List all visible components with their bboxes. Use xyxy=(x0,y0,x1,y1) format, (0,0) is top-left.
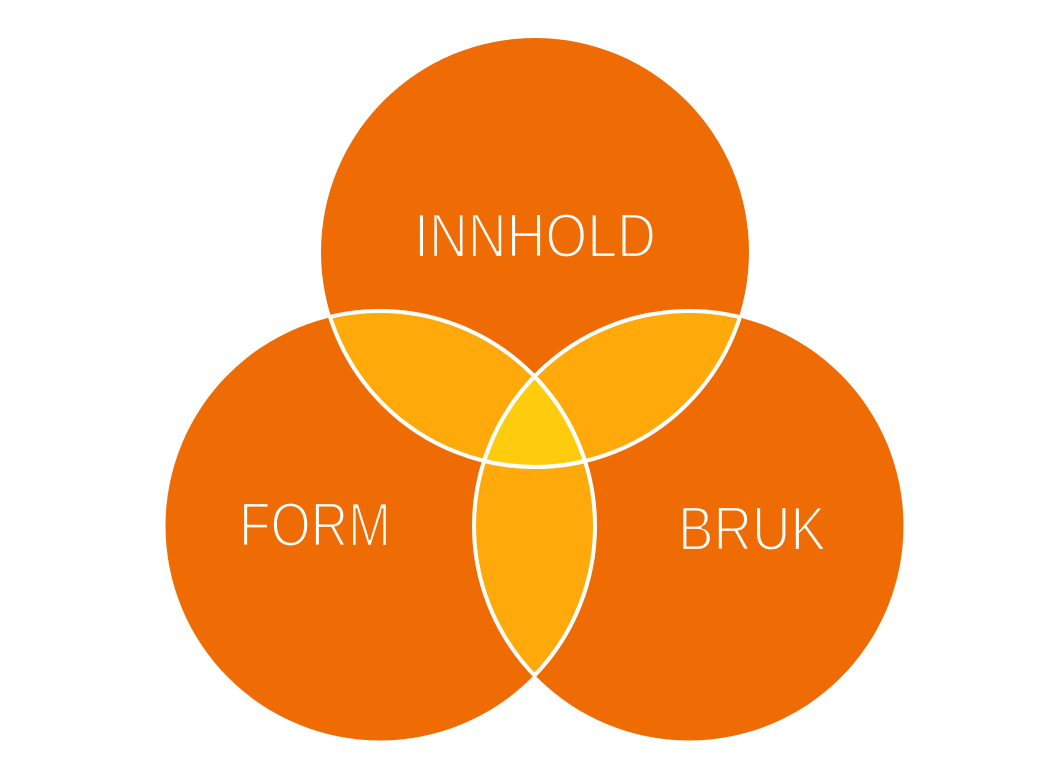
overlap: form and bruk xyxy=(476,463,593,672)
outline arcs: bruk circle xyxy=(472,309,740,676)
circle: bruk xyxy=(474,312,904,740)
overlap: innhold and form xyxy=(332,313,532,458)
outline arcs: form circle xyxy=(330,309,597,676)
label: form: FORM xyxy=(239,491,391,560)
label: innhold: INNHOLD xyxy=(414,202,656,271)
circle: innhold xyxy=(321,38,749,466)
overlap: innhold and bruk xyxy=(538,313,740,458)
circle: form xyxy=(166,312,594,740)
outline arcs: innhold circle xyxy=(328,317,742,469)
overlap: all three xyxy=(487,380,582,465)
venn diagram xyxy=(165,37,904,741)
label: bruk: BRUK xyxy=(678,495,826,564)
